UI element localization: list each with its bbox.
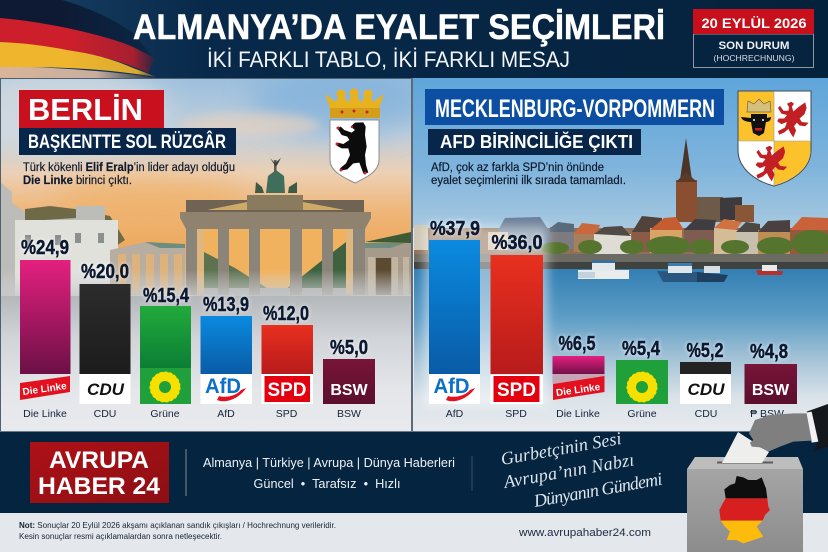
bar: bsw 5,0: BSW (337, 408, 361, 420)
bar: die linke 6,5: Die Linke (555, 382, 601, 399)
bar: afd 13,9: %13,9 (203, 294, 249, 316)
bar: grüne 15,4 (140, 285, 191, 420)
bar: spd 12,0: SPD (267, 380, 307, 401)
bar chart: berlin results (20, 237, 375, 420)
bar: bsw 5,0: %5,0 (330, 337, 368, 359)
bar: bsw 4,8 (744, 341, 797, 420)
subheading: başkentte sol rüzgâr (19, 128, 236, 155)
bar: afd 13,9: AfD (217, 408, 235, 420)
bar: spd 12,0: %12,0 (263, 303, 309, 325)
bar: die linke 24,9: %24,9 (21, 237, 69, 259)
ground fade (1, 272, 411, 296)
subheading: başkentte sol rüzgâr: BAŞKENTTE SOL RÜZGÂR (28, 131, 226, 153)
photo: brandenburg gate at sunset (1, 79, 411, 372)
bar: die linke 24,9: Die Linke (22, 381, 68, 398)
footnote: Not: Sonuçlar 20 Eylül 2026 akşamı açıklanan sandık çıkışları / Hochrechnung verileridir. (19, 521, 336, 530)
bar: bsw 4,8: ₱ BSW (750, 408, 784, 420)
bar: cdu 5,2 (680, 340, 731, 420)
bar: grüne 15,4: %15,4 (143, 285, 190, 307)
date badge (693, 9, 814, 68)
panel: mecklenburg-vorpommern (411, 78, 828, 431)
german flag (0, 0, 160, 78)
bar: cdu 5,2: CDU (695, 408, 717, 420)
bar: die linke 24,9: Die Linke (23, 408, 67, 420)
footnote (19, 521, 336, 541)
bar: cdu 5,2: %5,2 (686, 340, 724, 362)
logo: avrupa haber 24 (30, 442, 169, 503)
bar: cdu 20,0 (80, 261, 130, 420)
bar: grüne 5,4: Grüne (627, 408, 657, 420)
date badge: SON DURUM (718, 40, 790, 52)
text: berlin summary: Die Linke birinci çıktı. (23, 175, 132, 187)
footnote: Kesin sonuçlar resmi açıklamalardan sonra netleşecektir. (19, 532, 222, 541)
bar: cdu 20,0: %20,0 (81, 261, 129, 283)
bar: bsw 4,8: BSW (752, 382, 790, 399)
title: ALMANYA’DA EYALET SEÇİMLERİ (133, 8, 665, 47)
footer band (0, 428, 828, 513)
heading: berlin: BERLİN (28, 92, 143, 127)
logo: avrupa haber 24: HABER 24 (38, 473, 161, 500)
bar: cdu 20,0: CDU (87, 380, 125, 399)
bar chart: mv results (424, 218, 797, 420)
text: mv summary: AfD, çok az farkla SPD’nin önünde (431, 162, 604, 174)
text: coverage slogan: Almanya | Türkiye | Avrupa | Dünya Haberleri (203, 455, 455, 470)
heading: mecklenburg-vorpommern: MECKLENBURG-VORPOMMERN (435, 95, 715, 123)
icon: ballot box with hand (687, 404, 828, 552)
text: mv summary: eyalet seçimlerini ilk sırada tamamladı. (431, 175, 626, 187)
bar: cdu 5,2: CDU (688, 380, 725, 399)
text: handwritten tagline: Avrupa’nın Nabzı (501, 449, 636, 492)
bar: spd 36,0 (490, 232, 543, 420)
bar: spd 36,0: SPD (505, 408, 527, 420)
subheading: afd birinciliğe çıktı: AFD BİRİNCİLİĞE ÇIKTI (440, 131, 633, 152)
bar: spd 36,0: SPD (497, 380, 536, 401)
bar: grüne 5,4 (616, 338, 668, 420)
text: berlin summary: Türk kökenli Elif Eralp’in lider adayı olduğu (23, 162, 235, 174)
bar: grüne 5,4: %5,4 (622, 338, 661, 360)
bar: spd 12,0: SPD (276, 408, 298, 420)
ballot paper (722, 432, 769, 463)
bar: bsw 5,0: BSW (330, 382, 369, 399)
bar: cdu 20,0: CDU (94, 408, 116, 420)
logo: avrupa haber 24: AVRUPA (49, 447, 149, 474)
icon: germany map in flag colours (719, 476, 770, 543)
bar: die linke 6,5 (552, 333, 604, 420)
hand (749, 404, 828, 452)
text: coverage slogan: Güncel • Tarafsız • Hızlı (254, 476, 400, 491)
bar: spd 36,0: %36,0 (492, 232, 542, 254)
bar: spd 12,0 (262, 303, 313, 420)
heading: mecklenburg-vorpommern (425, 89, 724, 125)
subtitle: İKİ FARKLI TABLO, İKİ FARKLI MESAJ (207, 47, 570, 72)
text: handwritten tagline (499, 428, 664, 511)
date badge: 20 EYLÜL 2026 (702, 15, 807, 31)
panel: berlin (0, 65, 430, 432)
bar: afd 37,9 (429, 218, 480, 420)
ballot box (687, 457, 803, 552)
text: berlin summary (23, 162, 235, 187)
bar: die linke 6,5: %6,5 (558, 333, 596, 355)
bar: afd 37,9: AfD (446, 408, 464, 420)
panel frame (0, 78, 412, 432)
text: mv summary (431, 162, 626, 187)
bar: bsw 4,8: %4,8 (750, 341, 788, 363)
text: handwritten tagline: Dünyanın Gündemi (531, 469, 664, 511)
bar: die linke 6,5: Die Linke (556, 408, 600, 420)
bar: die linke 24,9 (20, 237, 70, 420)
bar: bsw 5,0 (323, 337, 375, 420)
text: coverage slogan (203, 455, 455, 491)
date badge: (HOCHRECHNUNG) (714, 54, 795, 63)
panel divider (411, 78, 413, 431)
bar: grüne 15,4: Grüne (150, 408, 180, 420)
bar: afd 37,9: %37,9 (430, 218, 480, 240)
icon: mv coat of arms (738, 91, 811, 186)
bar: afd 37,9: AfD (434, 375, 470, 398)
header band (0, 0, 828, 78)
photo: harbour town (413, 78, 828, 431)
text: handwritten tagline: Gurbetçinin Sesi (499, 428, 623, 469)
bar: afd 13,9 (200, 294, 252, 420)
icon: berlin coat of arms (325, 88, 384, 183)
website url: www.avrupahaber24.com (518, 527, 651, 539)
bar: afd 13,9: AfD (205, 375, 241, 398)
